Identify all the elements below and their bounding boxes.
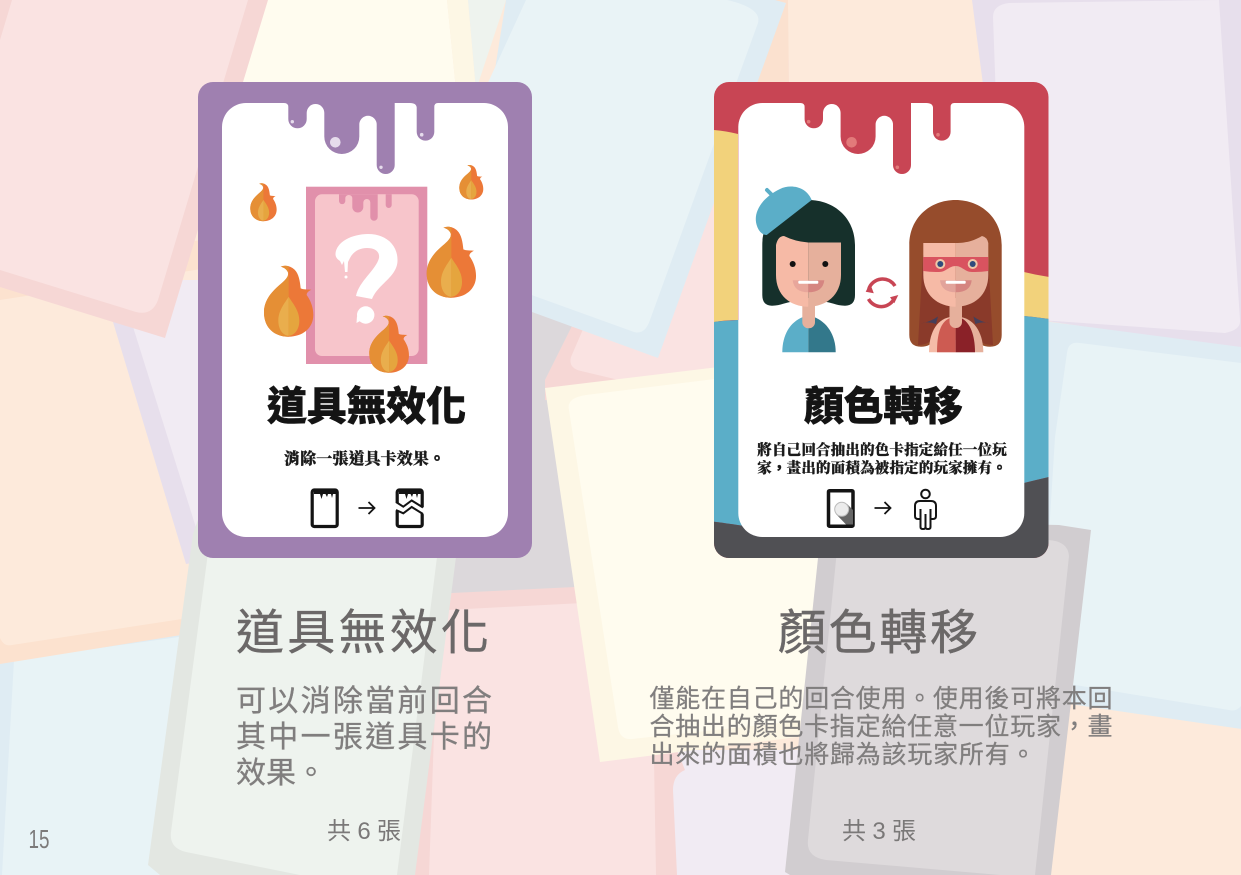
text block: colour transfer description: 出來的面積也將歸為該玩家所有。: [650, 741, 1036, 769]
icon: player figure: [915, 490, 936, 529]
card effect text: [757, 441, 1007, 478]
text block: item negate description: 可以消除當前回合: [236, 685, 492, 718]
card effect text: 消除一張道具卡效果。: [284, 445, 445, 469]
icon: mystery item card: [306, 187, 427, 364]
count: 6 cards: 共 6 張: [327, 818, 401, 845]
icon: small top-right flame: [459, 165, 483, 200]
icon: intact card: [312, 490, 337, 526]
text block: item negate description: 效果。: [236, 757, 326, 790]
card effect text: 家，畫出的面積為被指定的玩家擁有。: [757, 457, 1007, 478]
illustration: girl with red mask: [909, 200, 1002, 352]
purple paint drips: [284, 103, 438, 174]
text block: item negate description: [236, 685, 492, 790]
panel: red card 顏色轉移: [714, 82, 1049, 558]
heading: 道具無效化: 道具無效化: [236, 607, 489, 660]
card title: 道具無效化: [267, 384, 466, 429]
panel: purple card 道具無效化: [198, 82, 532, 558]
page number: 15: [28, 824, 50, 854]
text block: colour transfer description: [650, 685, 1112, 769]
text block: colour transfer description: 合抽出的顏色卡指定給任意一位玩家，畫: [650, 713, 1112, 741]
red paint drips: [800, 103, 954, 174]
icon: arrow: [874, 502, 890, 514]
icon: small top-left flame: [250, 183, 277, 221]
count: 3 cards: 共 3 張: [842, 818, 916, 845]
text block: colour transfer description: 僅能在自己的回合使用。使用後可將本回: [650, 685, 1112, 713]
card title: 顏色轉移: [804, 385, 963, 429]
icon: large left flame: [264, 266, 313, 337]
icon: torn card: [394, 490, 425, 526]
icon: arrow: [358, 502, 374, 514]
card coloured bands: [714, 82, 1049, 558]
text block: item negate description: 其中一張道具卡的: [236, 721, 492, 754]
icon: colour card: [828, 491, 853, 526]
heading: 顏色轉移: 顏色轉移: [778, 607, 978, 660]
card effect text: 將自己回合抽出的色卡指定給任一位玩: [757, 441, 1007, 459]
illustration: girl with blue beret: [756, 187, 855, 352]
icon: swap arrows: [866, 279, 898, 307]
icon: right flame: [427, 227, 476, 298]
icon: bottom flame: [369, 316, 409, 373]
